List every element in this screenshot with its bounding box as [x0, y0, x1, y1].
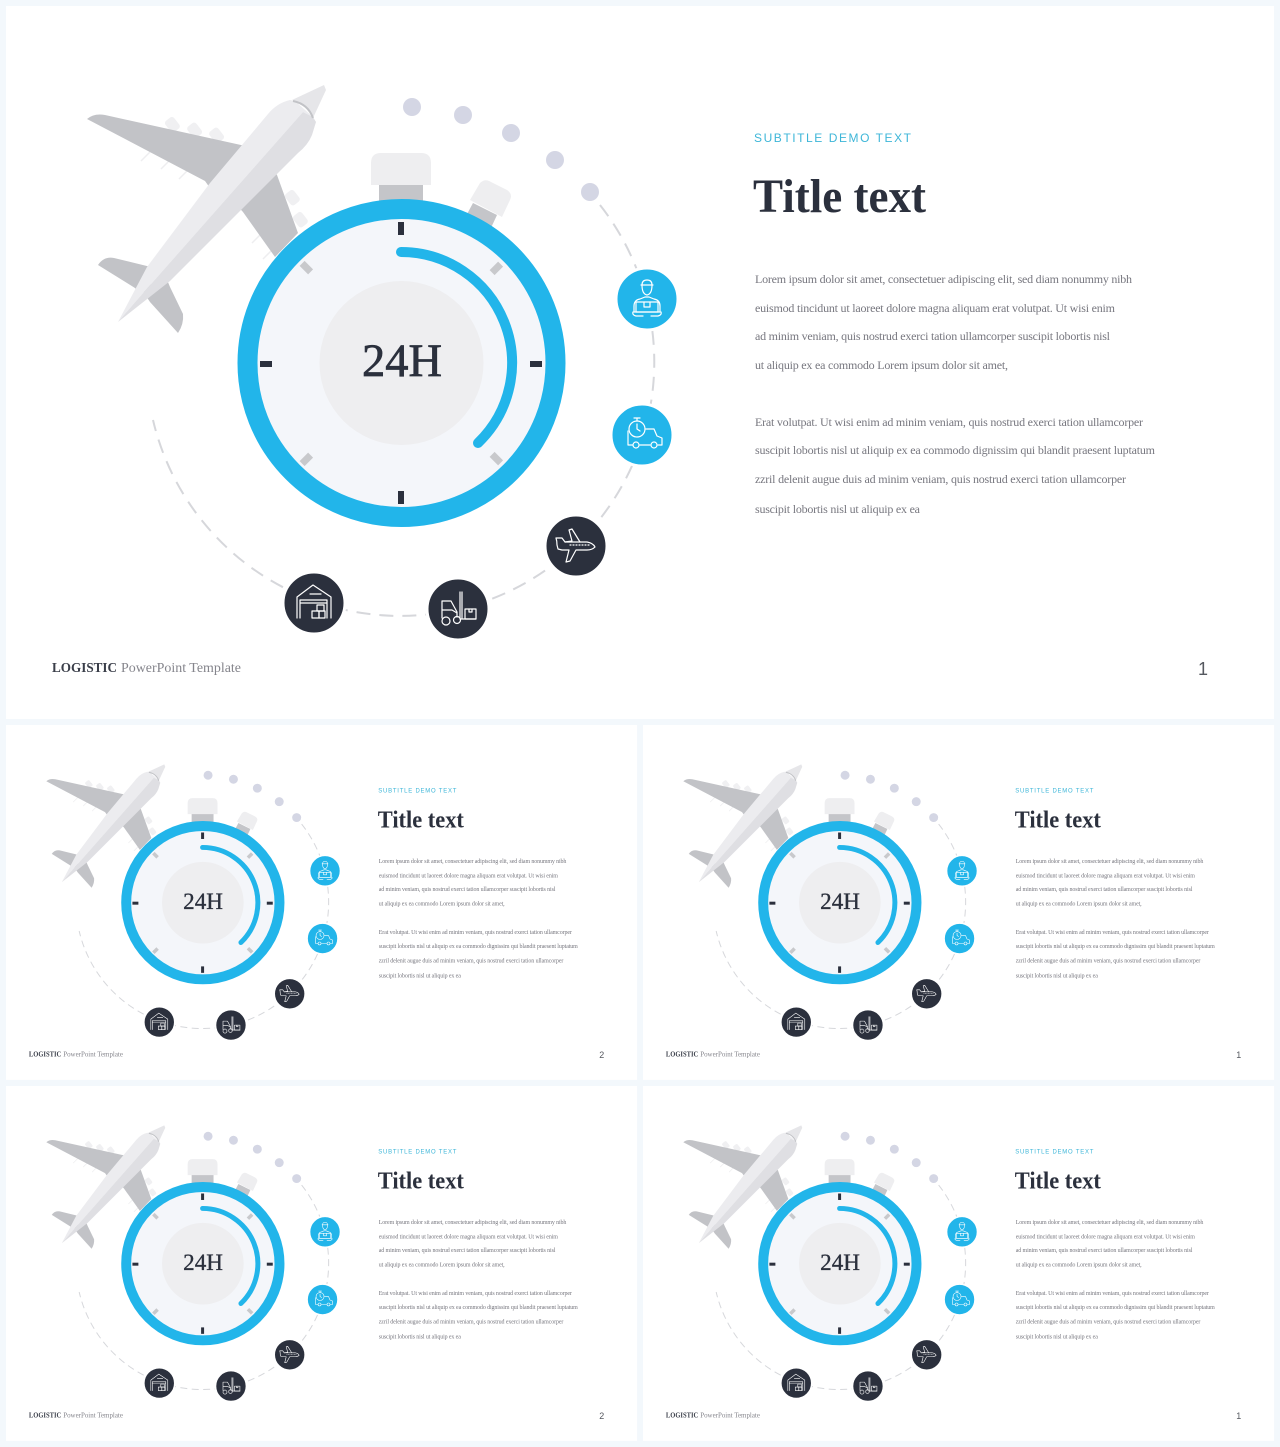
title: Title text	[1015, 1169, 1101, 1195]
body text: suscipit lobortis nisl ut aliquip ex ea commodo dignissim qui blandit praesent luptatum	[379, 1305, 578, 1311]
body text: euismod tincidunt ut laoreet dolore magna aliquam erat volutpat. Ut wisi enim	[755, 301, 1116, 315]
body text: Lorem ipsum dolor sit amet, consectetuer adipiscing elit, sed diam nonummy nibh	[755, 272, 1132, 286]
body text: Erat volutpat. Ut wisi enim ad minim veniam, quis nostrud exerci tation ullamcorper	[1016, 1291, 1209, 1297]
body text: ad minim veniam, quis nostrud exerci tation ullamcorper suscipit lobortis nisl	[755, 329, 1111, 343]
panel: slide thumbnail bottom left	[6, 1086, 637, 1441]
body text: ad minim veniam, quis nostrud exerci tation ullamcorper suscipit lobortis nisl	[379, 1248, 556, 1254]
body text: Erat volutpat. Ut wisi enim ad minim veniam, quis nostrud exerci tation ullamcorper	[379, 1291, 572, 1297]
icon: airplane	[545, 515, 607, 577]
title: Title text	[753, 170, 926, 223]
body text: suscipit lobortis nisl ut aliquip ex ea	[379, 1334, 461, 1340]
footer label: LOGISTIC	[666, 1411, 698, 1419]
body text: zzril delenit augue duis ad minim veniam, quis nostrud exerci tation ullamcorper	[755, 472, 1126, 486]
body text: suscipit lobortis nisl ut aliquip ex ea	[1016, 973, 1098, 979]
footer label: LOGISTIC	[666, 1050, 698, 1058]
body text: suscipit lobortis nisl ut aliquip ex ea commodo dignissim qui blandit praesent luptatum	[755, 443, 1156, 457]
body text: euismod tincidunt ut laoreet dolore magna aliquam erat volutpat. Ut wisi enim	[1016, 1234, 1195, 1240]
body text: euismod tincidunt ut laoreet dolore magna aliquam erat volutpat. Ut wisi enim	[1016, 873, 1195, 879]
body text: Erat volutpat. Ut wisi enim ad minim veniam, quis nostrud exerci tation ullamcorper	[755, 415, 1143, 429]
subtitle: SUBTITLE DEMO TEXT	[378, 1150, 457, 1156]
subtitle: SUBTITLE DEMO TEXT	[1015, 1150, 1094, 1156]
title: Title text	[1015, 808, 1101, 834]
body text: zzril delenit augue duis ad minim veniam, quis nostrud exerci tation ullamcorper	[379, 1319, 563, 1325]
footer label	[666, 1411, 760, 1419]
stopwatch dial	[248, 209, 556, 517]
icon: stopwatch crown	[371, 153, 511, 230]
dial label: 24H	[362, 335, 442, 387]
body text: suscipit lobortis nisl ut aliquip ex ea	[379, 973, 461, 979]
footer label	[666, 1050, 760, 1058]
subtitle: SUBTITLE DEMO TEXT	[378, 789, 457, 795]
body text: suscipit lobortis nisl ut aliquip ex ea commodo dignissim qui blandit praesent luptatum	[1016, 1305, 1215, 1311]
panel: slide thumbnail bottom right	[643, 1086, 1274, 1441]
body text	[755, 272, 1156, 516]
body text	[379, 1220, 578, 1340]
diagram copy	[46, 1125, 340, 1402]
body text: suscipit lobortis nisl ut aliquip ex ea	[755, 502, 921, 516]
icon: airplane	[87, 85, 326, 333]
panel: slide thumbnail top left	[6, 725, 637, 1080]
footer label: PowerPoint Template	[700, 1411, 760, 1419]
footer label: PowerPoint Template	[121, 661, 241, 676]
panel: main slide	[6, 6, 1274, 719]
body text: Lorem ipsum dolor sit amet, consectetuer adipiscing elit, sed diam nonummy nibh	[1016, 859, 1203, 865]
body text: ad minim veniam, quis nostrud exerci tation ullamcorper suscipit lobortis nisl	[1016, 887, 1193, 893]
footer label: LOGISTIC	[29, 1411, 61, 1419]
body text: ut aliquip ex ea commodo Lorem ipsum dolor sit amet,	[379, 1263, 505, 1269]
body text: ad minim veniam, quis nostrud exerci tation ullamcorper suscipit lobortis nisl	[1016, 1248, 1193, 1254]
body text: euismod tincidunt ut laoreet dolore magna aliquam erat volutpat. Ut wisi enim	[379, 873, 558, 879]
footer label: PowerPoint Template	[63, 1050, 123, 1058]
footer label: LOGISTIC	[52, 661, 117, 676]
diagram copy	[683, 764, 977, 1041]
body text: zzril delenit augue duis ad minim veniam, quis nostrud exerci tation ullamcorper	[379, 958, 563, 964]
diagram: stopwatch and logistics route	[87, 85, 678, 640]
footer label: LOGISTIC	[29, 1050, 61, 1058]
body text: euismod tincidunt ut laoreet dolore magna aliquam erat volutpat. Ut wisi enim	[379, 1234, 558, 1240]
page number: 1	[1198, 659, 1208, 679]
body text: Lorem ipsum dolor sit amet, consectetuer adipiscing elit, sed diam nonummy nibh	[379, 1220, 566, 1226]
subtitle: SUBTITLE DEMO TEXT	[754, 131, 912, 145]
footer label	[29, 1050, 123, 1058]
body text: suscipit lobortis nisl ut aliquip ex ea commodo dignissim qui blandit praesent luptatum	[1016, 944, 1215, 950]
page number: 2	[599, 1411, 604, 1421]
page number: 1	[1236, 1411, 1241, 1421]
body text	[379, 859, 578, 979]
body text: zzril delenit augue duis ad minim veniam, quis nostrud exerci tation ullamcorper	[1016, 958, 1200, 964]
footer label	[52, 661, 241, 676]
progress arc	[401, 252, 512, 443]
body text: zzril delenit augue duis ad minim veniam, quis nostrud exerci tation ullamcorper	[1016, 1319, 1200, 1325]
body text: suscipit lobortis nisl ut aliquip ex ea	[1016, 1334, 1098, 1340]
body text: ut aliquip ex ea commodo Lorem ipsum dolor sit amet,	[379, 902, 505, 908]
dotted route	[403, 98, 599, 201]
body text: ad minim veniam, quis nostrud exerci tation ullamcorper suscipit lobortis nisl	[379, 887, 556, 893]
body text	[1016, 1220, 1215, 1340]
body text: ut aliquip ex ea commodo Lorem ipsum dolor sit amet,	[755, 358, 1008, 372]
body text: Lorem ipsum dolor sit amet, consectetuer adipiscing elit, sed diam nonummy nibh	[1016, 1220, 1203, 1226]
title: Title text	[378, 808, 464, 834]
page number: 1	[1236, 1050, 1241, 1060]
diagram copy	[46, 764, 340, 1041]
body text	[1016, 859, 1215, 979]
dashed route	[153, 205, 654, 616]
body text: suscipit lobortis nisl ut aliquip ex ea commodo dignissim qui blandit praesent luptatum	[379, 944, 578, 950]
footer label: PowerPoint Template	[63, 1411, 123, 1419]
icon: warehouse	[283, 572, 345, 634]
icon: forklift	[427, 578, 489, 640]
body text: ut aliquip ex ea commodo Lorem ipsum dolor sit amet,	[1016, 1263, 1142, 1269]
footer label	[29, 1411, 123, 1419]
body text: Lorem ipsum dolor sit amet, consectetuer adipiscing elit, sed diam nonummy nibh	[379, 859, 566, 865]
dial ticks	[260, 222, 542, 504]
body text: Erat volutpat. Ut wisi enim ad minim veniam, quis nostrud exerci tation ullamcorper	[1016, 930, 1209, 936]
diagram copy	[683, 1125, 977, 1402]
footer label: PowerPoint Template	[700, 1050, 760, 1058]
body text: Erat volutpat. Ut wisi enim ad minim veniam, quis nostrud exerci tation ullamcorper	[379, 930, 572, 936]
subtitle: SUBTITLE DEMO TEXT	[1015, 789, 1094, 795]
dial centre	[320, 281, 484, 445]
page number: 2	[599, 1050, 604, 1060]
panel: slide thumbnail top right	[643, 725, 1274, 1080]
body text: ut aliquip ex ea commodo Lorem ipsum dolor sit amet,	[1016, 902, 1142, 908]
icon: courier	[616, 268, 678, 330]
icon: delivery van with stopwatch	[611, 404, 673, 466]
title: Title text	[378, 1169, 464, 1195]
